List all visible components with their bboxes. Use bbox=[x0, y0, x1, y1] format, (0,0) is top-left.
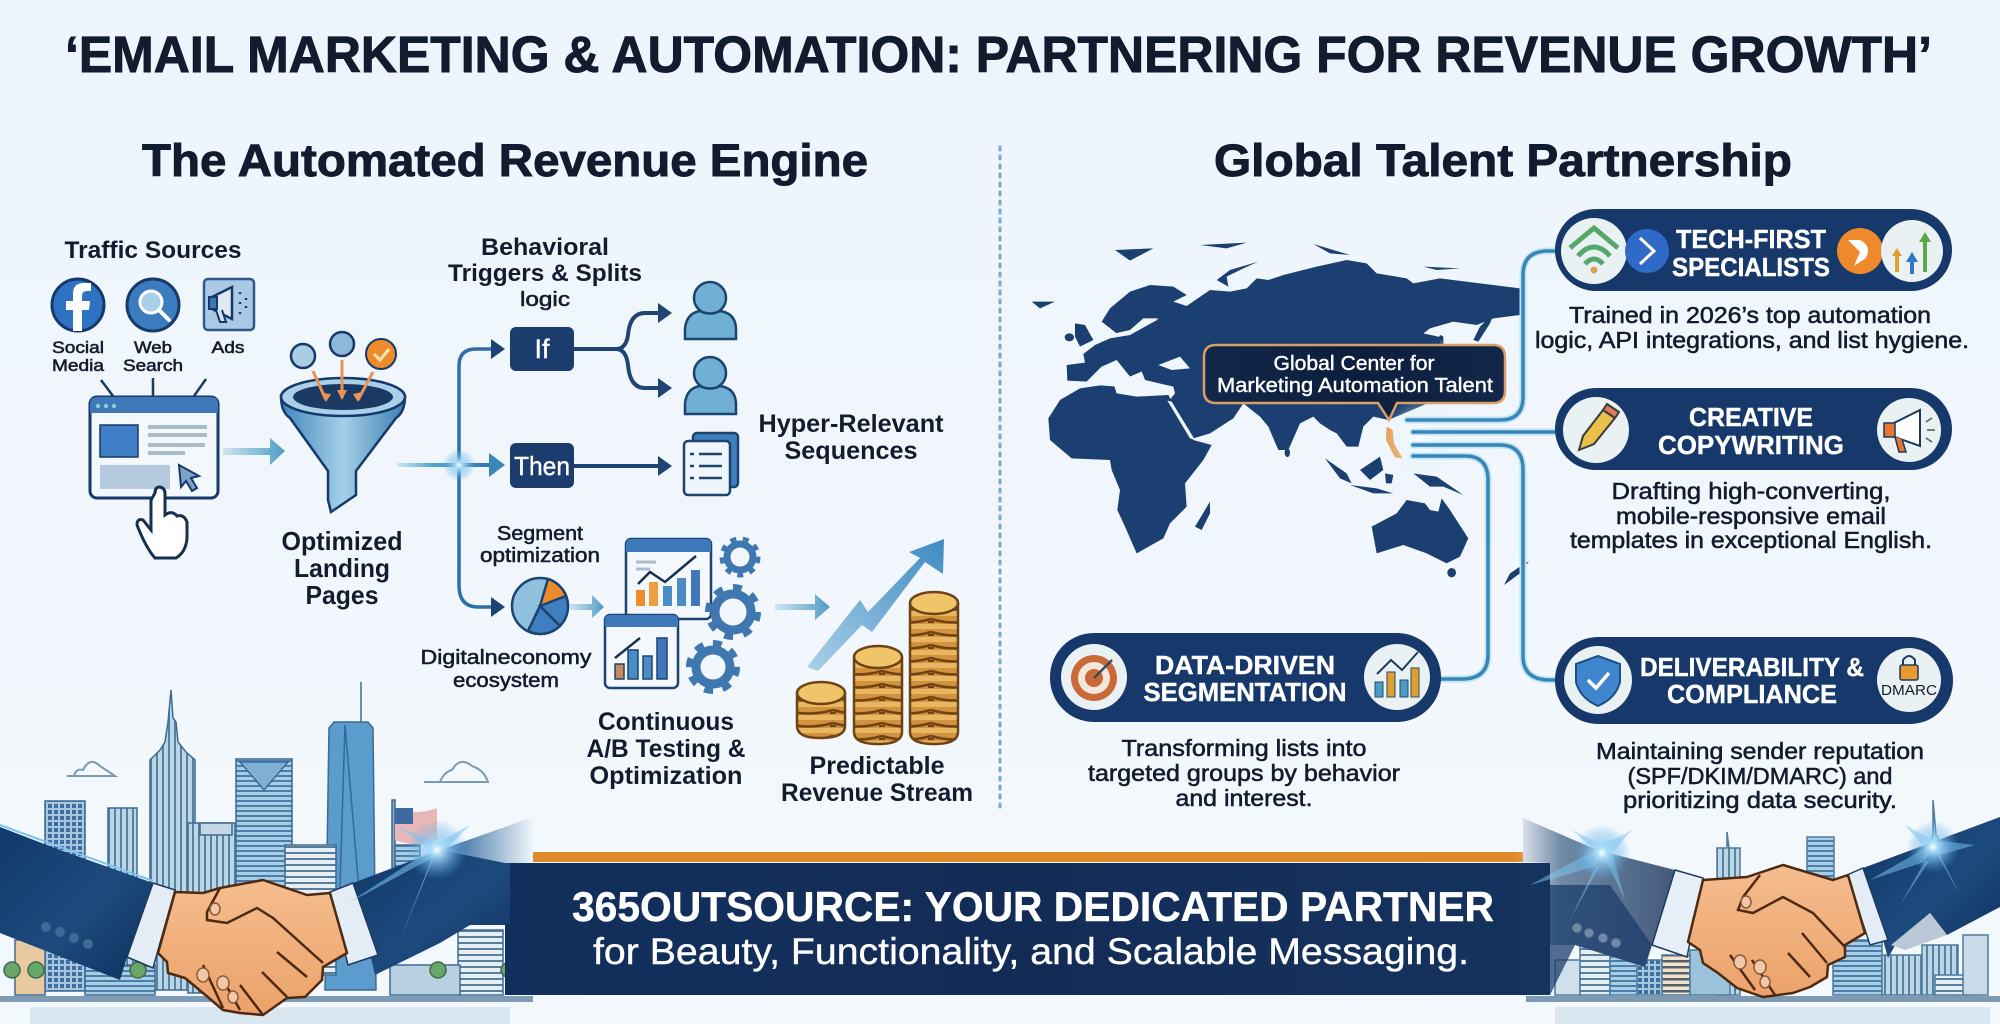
arrow trunk: funnel to if, then, segment bbox=[397, 339, 505, 617]
panel: automated revenue engine bbox=[52, 234, 973, 807]
traffic source labels: Media bbox=[52, 356, 105, 375]
predictable revenue label bbox=[781, 752, 973, 807]
icon: arrows logo bbox=[1881, 220, 1943, 282]
text: data-driven description: and interest. bbox=[1176, 785, 1312, 811]
pill: tech-first specialists: TECH-FIRST bbox=[1676, 224, 1826, 254]
icon: funnel bbox=[281, 332, 405, 512]
divider bbox=[998, 147, 1002, 810]
banner bbox=[446, 852, 1561, 995]
text: tech-first description bbox=[1535, 302, 1969, 353]
banner headline: 365OUTSOURCE: YOUR DEDICATED PARTNER bbox=[572, 883, 1494, 930]
title: ‘EMAIL MARKETING & AUTOMATION: PARTNERING FOR REVENUE GROWTH’ bbox=[65, 26, 1932, 83]
then block bbox=[510, 443, 574, 488]
skyline left bbox=[0, 682, 533, 1024]
icon: shield bbox=[1564, 646, 1632, 714]
panel: bar chart bbox=[605, 615, 678, 688]
pill: tech-first specialists: SPECIALISTS bbox=[1672, 252, 1830, 282]
icon: gears bbox=[689, 539, 758, 691]
behavioral triggers label: logic bbox=[520, 289, 570, 311]
icon: pencil bbox=[1563, 397, 1629, 463]
text: creative description: Drafting high-converting, bbox=[1612, 478, 1890, 504]
pill: deliverability and compliance: COMPLIANCE bbox=[1667, 679, 1837, 709]
pill: deliverability and compliance bbox=[1555, 637, 1953, 724]
pill: creative copywriting: COPYWRITING bbox=[1658, 430, 1844, 460]
handshake left bbox=[0, 817, 533, 1015]
traffic source labels bbox=[52, 338, 244, 375]
icon: megaphone bbox=[1877, 398, 1941, 462]
continuous testing label: Continuous bbox=[598, 708, 734, 736]
icon: pie chart bbox=[512, 578, 568, 634]
source connector lines bbox=[101, 378, 206, 396]
text: data-driven description: targeted groups by behavior bbox=[1088, 760, 1400, 786]
segment optimization label: Segment bbox=[497, 523, 583, 545]
continuous testing label: Optimization bbox=[590, 762, 742, 790]
connector lines bbox=[1407, 251, 1558, 680]
arrow: charts to coins bbox=[775, 594, 830, 620]
text: creative description: mobile-responsive email bbox=[1616, 503, 1886, 529]
branch arrows bbox=[574, 303, 672, 476]
pill: creative copywriting: CREATIVE bbox=[1689, 402, 1813, 432]
world map bbox=[1032, 243, 1529, 585]
icon: dmarc lock bbox=[1877, 648, 1941, 712]
if block: If bbox=[534, 334, 550, 364]
optimized landing pages label: Pages bbox=[306, 580, 378, 610]
digital economy label: Digitalneconomy bbox=[420, 647, 592, 669]
icon: coin stacks bbox=[797, 592, 958, 744]
traffic source labels: Web bbox=[134, 338, 172, 357]
pill: data-driven segmentation: SEGMENTATION bbox=[1144, 677, 1346, 707]
icon: dmarc lock: DMARC bbox=[1881, 682, 1937, 699]
banner subline: for Beauty, Functionality, and Scalable Messaging. bbox=[593, 931, 1469, 972]
traffic sources label: Traffic Sources bbox=[64, 237, 242, 264]
panel: line and bar chart bbox=[626, 539, 711, 619]
predictable revenue label: Revenue Stream bbox=[781, 779, 973, 807]
icon: document stack bbox=[684, 433, 738, 495]
pill: deliverability and compliance: DELIVERABILITY & bbox=[1640, 652, 1864, 682]
icon: growth chart bbox=[1364, 644, 1430, 710]
hyper-relevant sequences label: Sequences bbox=[784, 437, 918, 465]
icon: person bottom bbox=[685, 357, 736, 414]
arrow: browser to funnel bbox=[223, 438, 285, 465]
icon: web search bbox=[127, 279, 179, 331]
icon: target bbox=[1061, 644, 1127, 710]
optimized landing pages label: Optimized bbox=[282, 526, 402, 556]
text: creative description: templates in exceptional English. bbox=[1570, 527, 1932, 553]
arrow: pie to charts bbox=[570, 595, 604, 618]
text: data-driven description: Transforming lists into bbox=[1122, 735, 1366, 761]
if block bbox=[510, 327, 574, 371]
icon: ads bbox=[204, 279, 254, 330]
text: deliverability description: (SPF/DKIM/DMARC) and bbox=[1628, 763, 1892, 789]
pill: data-driven segmentation bbox=[1050, 633, 1441, 722]
callout: global center bbox=[1204, 345, 1505, 420]
pill: tech-first specialists bbox=[1555, 209, 1952, 291]
text: deliverability description: Maintaining sender reputation bbox=[1596, 738, 1924, 764]
then block: Then bbox=[514, 451, 570, 481]
behavioral triggers label bbox=[448, 234, 642, 311]
icon: wifi logo bbox=[1561, 218, 1627, 284]
hyper-relevant sequences label: Hyper-Relevant bbox=[758, 410, 944, 438]
predictable revenue label: Predictable bbox=[810, 752, 945, 780]
handshake right bbox=[1523, 817, 2000, 997]
arrow: growth bbox=[807, 539, 944, 671]
icon: facebook bbox=[52, 279, 104, 331]
callout: global center: Marketing Automation Talent bbox=[1217, 375, 1493, 397]
digital economy label: ecosystem bbox=[453, 670, 559, 692]
heading: automated revenue engine: The Automated Revenue Engine bbox=[142, 135, 868, 186]
segment optimization label: optimization bbox=[480, 545, 600, 567]
pill: creative copywriting bbox=[1555, 388, 1952, 470]
icon: browser window bbox=[90, 397, 218, 498]
hyper-relevant sequences label bbox=[758, 410, 944, 465]
icon: orange logo bbox=[1837, 228, 1883, 274]
optimized landing pages label: Landing bbox=[294, 553, 390, 583]
behavioral triggers label: Behavioral bbox=[481, 234, 609, 261]
traffic source labels: Ads bbox=[212, 338, 244, 357]
continuous testing label bbox=[586, 708, 746, 790]
icon: pointer hand bbox=[137, 487, 187, 558]
text: tech-first description: logic, API integrations, and list hygiene. bbox=[1535, 327, 1969, 353]
text: deliverability description bbox=[1596, 738, 1924, 813]
traffic source labels: Social bbox=[52, 338, 104, 357]
text: deliverability description: prioritizing data security. bbox=[1623, 787, 1897, 813]
digital economy label bbox=[420, 647, 592, 692]
behavioral triggers label: Triggers & Splits bbox=[448, 260, 642, 287]
skyline right bbox=[1526, 800, 2000, 1024]
icon: blue arrow logo bbox=[1625, 229, 1669, 273]
text: creative description bbox=[1570, 478, 1932, 553]
pill: data-driven segmentation: DATA-DRIVEN bbox=[1155, 650, 1335, 680]
callout: global center: Global Center for bbox=[1274, 353, 1435, 375]
optimized landing pages label bbox=[282, 526, 402, 610]
segment optimization label bbox=[480, 523, 600, 567]
text: tech-first description: Trained in 2026’s top automation bbox=[1569, 302, 1931, 328]
traffic source labels: Search bbox=[123, 356, 183, 375]
heading: global talent partnership: Global Talent Partnership bbox=[1214, 135, 1792, 186]
connector glow bbox=[1384, 398, 1456, 478]
text: data-driven description bbox=[1088, 735, 1400, 811]
continuous testing label: A/B Testing & bbox=[586, 735, 746, 763]
icon: person top bbox=[685, 282, 736, 339]
